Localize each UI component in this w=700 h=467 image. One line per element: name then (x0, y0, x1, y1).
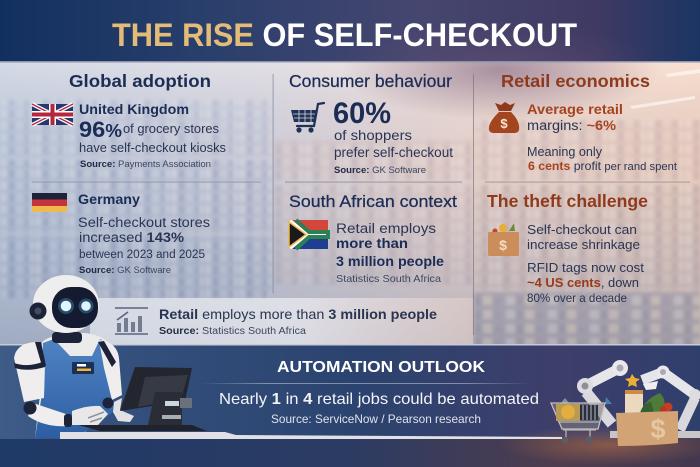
icon: produce box (488, 223, 519, 256)
title: THE RISE OF SELF-CHECKOUT (112, 17, 577, 53)
text: shrinkage and RFID (527, 222, 644, 305)
panel: retail economics (485, 71, 690, 183)
header banner (0, 0, 700, 120)
text: margins: margins: ~6% (527, 118, 616, 133)
text: 60% stat: Source: GK Software (334, 165, 426, 176)
panel: employment band (90, 298, 473, 345)
text: employment: Statistics South Africa (336, 273, 441, 285)
text: 60% stat (333, 97, 453, 176)
text: shrinkage and RFID: RFID tags now cost (527, 260, 644, 275)
panel: the theft challenge (487, 191, 648, 305)
robot arm right (610, 366, 700, 438)
checkout counter (60, 432, 562, 439)
icon: German flag (32, 193, 67, 212)
heading: the theft challenge: The theft challenge (487, 191, 648, 211)
text: margins: Meaning only (527, 145, 603, 159)
text: shrinkage and RFID: ~4 US cents, down (527, 275, 639, 290)
icon: South African flag (289, 220, 328, 249)
text: margins: Average retail (527, 102, 623, 117)
panel: South African context (289, 193, 457, 285)
text: Germany stat: Source: GK Software (79, 265, 171, 276)
robot arm left (577, 360, 628, 424)
text: United Kingdom stat: Source: Payments Association (80, 159, 211, 170)
text: United Kingdom stat (79, 101, 226, 170)
text: shrinkage and RFID: increase shrinkage (527, 237, 640, 252)
icon: bar chart (115, 308, 148, 334)
text: employment: more than (336, 236, 408, 251)
icon: money bag (489, 102, 519, 133)
checkout monitor (78, 367, 207, 431)
heading: automation outlook: AUTOMATION OUTLOOK (277, 359, 485, 376)
column dividers (273, 74, 474, 335)
panel: automation outlook (0, 344, 700, 467)
text: Germany stat: between 2023 and 2025 (79, 249, 205, 261)
text: source: Source: ServiceNow / Pearson research (271, 412, 481, 426)
text: employment: 3 million people (336, 254, 445, 269)
icon: money bag: $ (500, 116, 508, 131)
shopping cart (551, 398, 605, 444)
icon: shopping cart (291, 103, 324, 133)
icon: UK flag (32, 104, 73, 125)
grocery box (616, 374, 678, 446)
text: 60% stat: 60% (333, 97, 391, 130)
text: employment: Retail employs (336, 221, 436, 236)
text: shrinkage and RFID: Self-checkout can (527, 222, 637, 237)
panel: consumer behaviour (285, 71, 462, 183)
text: United Kingdom stat: United Kingdom (79, 101, 189, 117)
text: shrinkage and RFID: 80% over a decade (527, 291, 627, 305)
text: United Kingdom stat: have self-checkout kiosks (79, 140, 226, 155)
heading: global adoption: Global adoption (69, 71, 211, 91)
text: 60% stat: of shoppers (334, 128, 412, 143)
text: Germany stat: Self-checkout stores (78, 215, 210, 230)
text: source statistics: Source: Statistics South Africa (159, 326, 306, 337)
text: Germany stat: Germany (78, 192, 141, 207)
grocery box: $ (650, 414, 666, 444)
text: nearly 1 in 4: Nearly 1 in 4 retail jobs could be automated (219, 391, 539, 408)
heading: retail economics: Retail economics (501, 71, 650, 91)
heading: South African context: South African context (289, 193, 457, 211)
illustration: robot cashier (14, 275, 562, 439)
heading: consumer behaviour: Consumer behaviour (289, 71, 452, 91)
text: United Kingdom stat: 96% (79, 117, 122, 142)
text: margins (527, 102, 677, 173)
robot head (30, 275, 99, 333)
text: employment (336, 221, 445, 285)
text: Germany stat (78, 192, 210, 276)
text: 60% stat: prefer self-checkout (334, 145, 453, 160)
illustration: robotic arms, cart and grocery box (551, 360, 700, 446)
icon: produce box: $ (499, 237, 507, 253)
text: retail employs: Retail employs more than 3 million people (159, 306, 437, 322)
text: margins: 6 cents profit per rand spent (528, 159, 677, 173)
text: Germany stat: increased 143% (79, 230, 184, 245)
panel: global adoption (32, 71, 261, 276)
robot body (14, 332, 134, 438)
text: United Kingdom stat: of grocery stores (123, 121, 219, 136)
